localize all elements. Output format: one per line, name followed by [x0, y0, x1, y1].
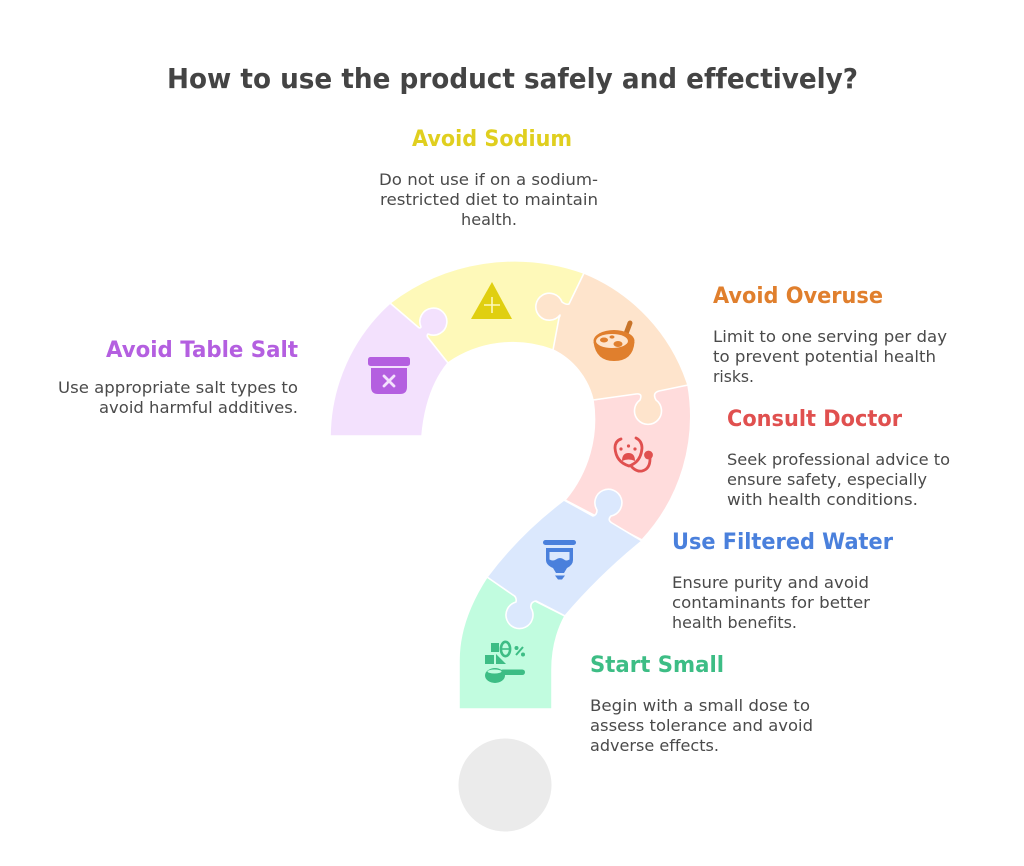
- text block: avoid sodium: Avoid Sodium: [412, 127, 572, 152]
- text block: avoid overuse: [713, 284, 947, 386]
- icon: warning triangle with plus: [471, 282, 512, 319]
- piece: blue: [487, 489, 642, 629]
- icon: water filter: [543, 540, 576, 580]
- text block: avoid overuse: Limit to one serving per day: [713, 327, 947, 346]
- text block: avoid table salt: Avoid Table Salt: [106, 338, 298, 363]
- text block: use filtered water: Use Filtered Water: [672, 530, 893, 555]
- text block: avoid overuse: to prevent potential health: [713, 347, 936, 366]
- text block: start small: adverse effects.: [590, 736, 719, 755]
- text block: start small: [590, 653, 813, 755]
- text block: avoid sodium: Do not use if on a sodium-: [379, 170, 598, 189]
- text block: avoid table salt: [58, 338, 298, 417]
- text block: use filtered water: [672, 530, 893, 632]
- text block: start small: Begin with a small dose to: [590, 696, 810, 715]
- text block: consult doctor: ensure safety, especially: [727, 470, 927, 489]
- piece: orange: [536, 273, 688, 424]
- icon: bowl with spoon: [594, 323, 634, 361]
- text block: start small: Start Small: [590, 653, 724, 678]
- text block: use filtered water: contaminants for better: [672, 593, 870, 612]
- text block: start small: assess tolerance and avoid: [590, 716, 813, 735]
- icon: spoon with salt cubes: [485, 642, 525, 683]
- text block: avoid sodium: restricted diet to maintain: [380, 190, 598, 209]
- dot of question mark: [458, 738, 552, 832]
- text block: avoid sodium: health.: [461, 210, 517, 229]
- title: How to use the product safely and effectively?: [167, 62, 858, 95]
- text block: avoid table salt: Use appropriate salt types to: [58, 378, 298, 397]
- piece: purple: [330, 303, 448, 436]
- text block: consult doctor: [727, 407, 950, 509]
- icon: stethoscope with paw: [615, 438, 653, 471]
- text block: avoid overuse: risks.: [713, 367, 754, 386]
- text block: avoid overuse: Avoid Overuse: [713, 284, 883, 309]
- text block: consult doctor: Consult Doctor: [727, 407, 902, 432]
- text block: avoid sodium: [379, 127, 598, 229]
- piece: yellow: [390, 261, 584, 363]
- text block: use filtered water: health benefits.: [672, 613, 797, 632]
- text block: use filtered water: Ensure purity and avoid: [672, 573, 869, 592]
- question mark puzzle graphic: [330, 261, 691, 709]
- piece: pink: [565, 385, 691, 540]
- piece: green: [459, 577, 565, 709]
- icon: jar with cross: [368, 357, 410, 394]
- text block: consult doctor: with health conditions.: [727, 490, 918, 509]
- text block: consult doctor: Seek professional advice to: [727, 450, 950, 469]
- text block: avoid table salt: avoid harmful additives.: [99, 398, 298, 417]
